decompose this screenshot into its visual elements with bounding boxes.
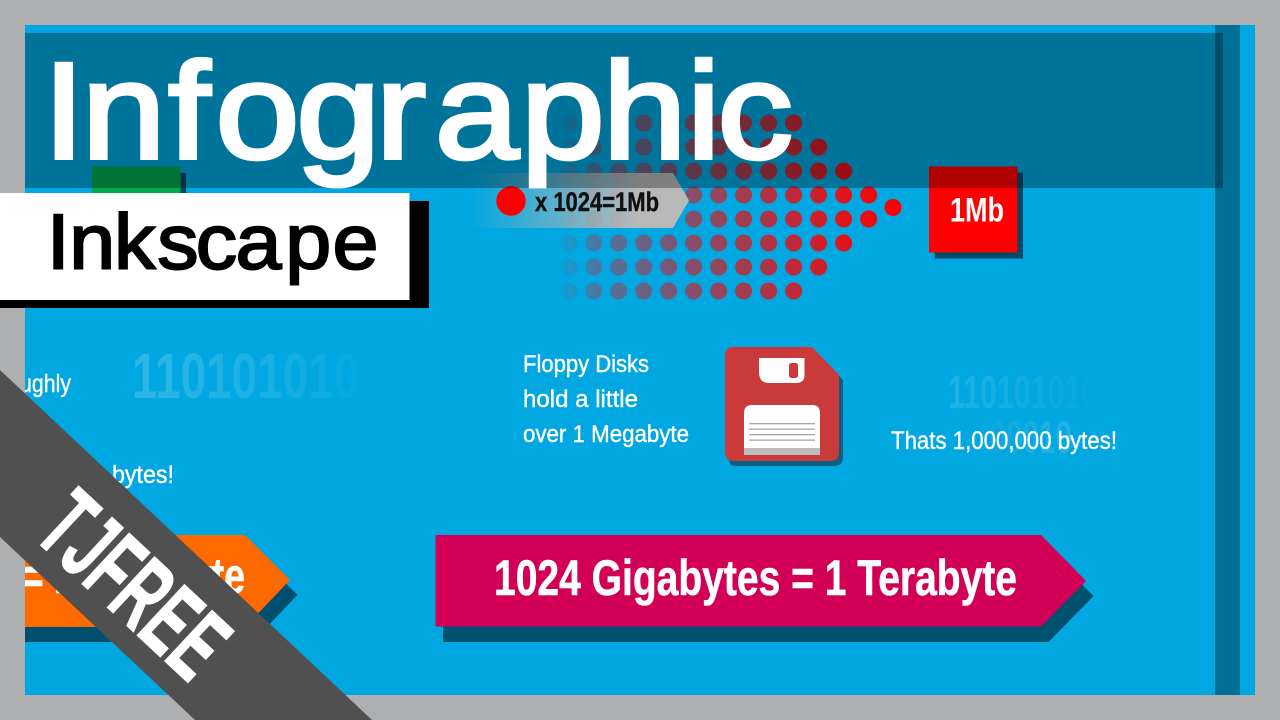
text: floppy disks: hold a little [523, 386, 638, 413]
1Mb red box: 1Mb [950, 192, 1004, 230]
dot arrow tip [884, 199, 902, 216]
arrow: 1024 dots label: x 1024=1Mb [535, 187, 659, 217]
subtitle label: Inkscape [0, 193, 429, 308]
text: floppy disks [523, 351, 689, 448]
icon: floppy disk [725, 347, 843, 466]
binary watermark right: 10100010 [940, 411, 1072, 463]
binary watermark right [950, 376, 1071, 454]
arrow: pink terabyte banner: 1024 Gigabytes = 1 Terabyte [494, 550, 1017, 606]
title band [25, 33, 1223, 188]
title: Infographic [43, 34, 793, 187]
text: thats 1,000,000 bytes: Thats 1,000,000 bytes! [891, 427, 1117, 455]
binary watermark left: 1101010101 [132, 340, 385, 412]
subtitle label: Inkscape: Inkscape [47, 199, 379, 286]
dot arrow chart [569, 123, 869, 291]
icon: green box [92, 166, 186, 193]
text: bytes: bytes! [112, 461, 174, 489]
arrow: 1024 dots label [470, 173, 689, 228]
text: floppy disks: over 1 Megabyte [523, 421, 689, 448]
ribbon: TJFREE [0, 370, 372, 720]
1Mb red box [929, 166, 1023, 258]
arrow: pink terabyte banner [436, 535, 1094, 642]
binary watermark right: 1101010101 [948, 366, 1115, 418]
text: floppy disks: Floppy Disks [523, 351, 649, 378]
arrow: orange gigabyte banner [0, 535, 298, 642]
right stripe [1215, 25, 1240, 695]
text: roughly: roughly [1, 370, 71, 398]
